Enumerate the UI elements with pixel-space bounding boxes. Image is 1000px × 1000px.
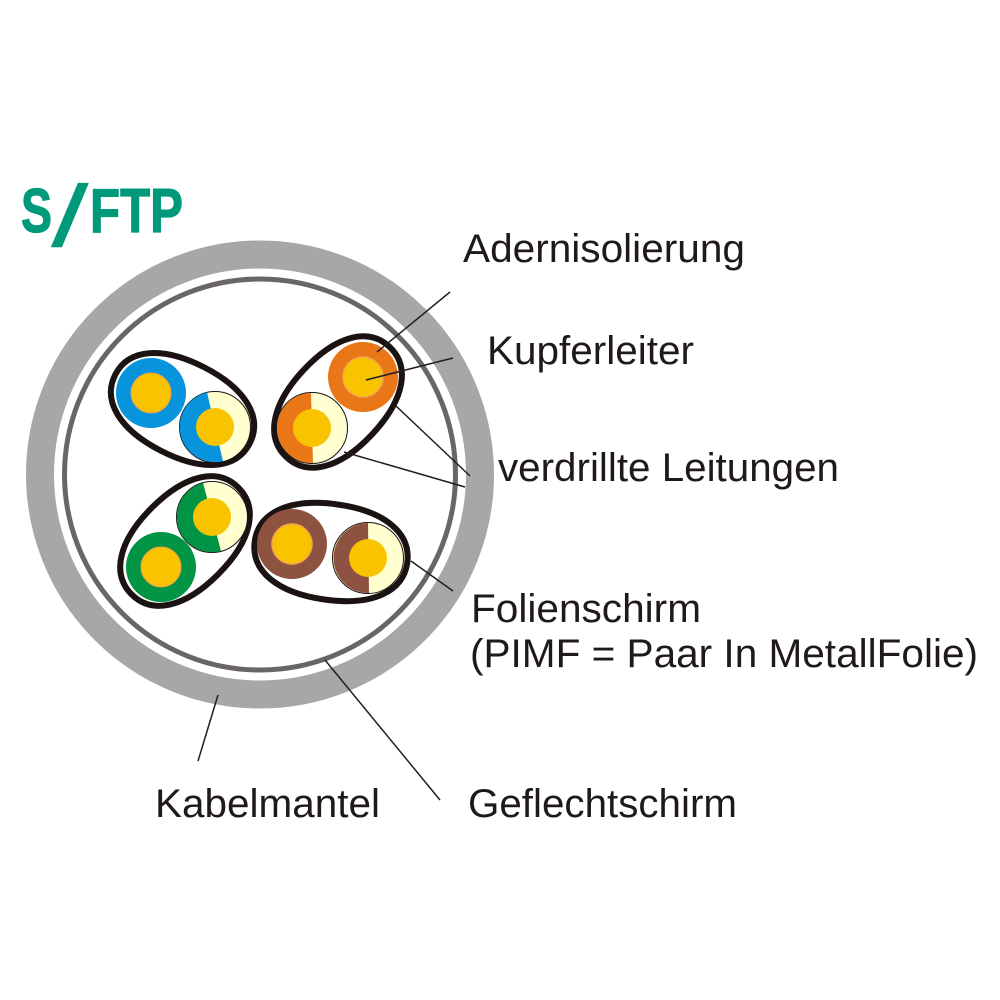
cable jacket (Kabelmantel) — [40, 254, 480, 694]
label: Kabelmantel: Kabelmantel — [155, 782, 380, 826]
label: Kupferleiter: Kupferleiter — [487, 329, 694, 373]
label: Adernisolierung: Adernisolierung — [463, 227, 745, 271]
title: S/FTP: FTP — [90, 177, 183, 246]
label: Folienschirm: Folienschirm — [471, 587, 701, 631]
label: verdrillte Leitungen: verdrillte Leitungen — [498, 446, 839, 490]
braid shield (Geflechtschirm) — [64, 279, 456, 670]
label: PIMF explanation: (PIMF = Paar In MetallFolie) — [470, 632, 978, 676]
title: S/FTP: / — [47, 169, 92, 264]
pair: blue — [94, 333, 271, 485]
leader lines — [198, 292, 470, 800]
title: S/FTP: S — [21, 177, 52, 246]
title: S/FTP — [21, 169, 183, 264]
pair: brown — [248, 494, 414, 610]
label: Geflechtschirm: Geflechtschirm — [468, 782, 737, 826]
pair: green — [98, 454, 272, 628]
pair: orange — [252, 315, 424, 489]
